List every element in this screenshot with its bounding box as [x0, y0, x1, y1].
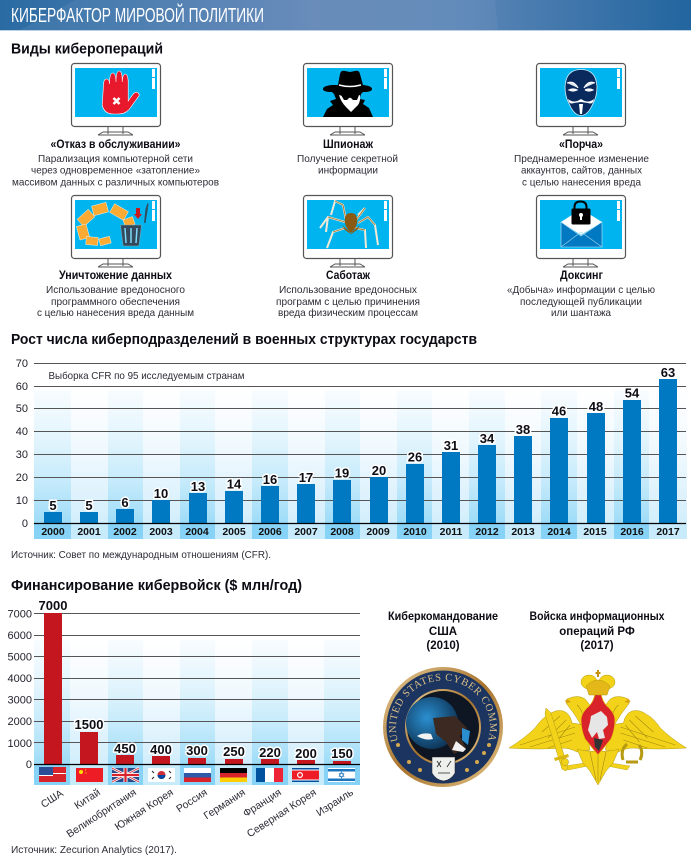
y axis labels: 60 [16, 381, 28, 393]
description: Использование вредоносного [46, 285, 185, 296]
bar chart: funding by country [8, 598, 360, 840]
emblem: cyber command seal: UNITED STATES CYBER COMMAND [389, 674, 497, 742]
value labels: 1500 [75, 717, 103, 732]
year labels: 2007 [294, 526, 318, 538]
year labels [41, 526, 680, 538]
country labels: Франция [241, 786, 284, 820]
year labels: 2002 [113, 526, 137, 538]
description: с целью нанесения вреда [522, 178, 641, 188]
description: вреда физическим процессам [278, 307, 418, 319]
value labels: 450 [114, 741, 136, 756]
caption: (2010) [426, 640, 460, 652]
year labels: 2015 [583, 526, 607, 538]
y axis labels: 2000 [8, 716, 32, 728]
value labels: 31 [444, 438, 458, 453]
panel: Russian information operations troops [509, 611, 686, 785]
value labels: 7000 [39, 598, 67, 613]
year labels: 2011 [440, 526, 463, 538]
description: Использование вредоносных [279, 285, 418, 296]
country labels: Китай [72, 786, 103, 812]
value labels: 16 [263, 472, 277, 487]
country labels: Германия [202, 786, 248, 822]
value labels [39, 598, 353, 761]
year labels: 2003 [149, 526, 173, 538]
value labels: 400 [150, 742, 172, 757]
source: Zecurion: Источник: Zecurion Analytics (2017). [11, 845, 177, 856]
year labels: 2010 [403, 526, 427, 538]
value labels: 250 [223, 744, 245, 759]
description: массивом данных с различных компьютеров [12, 178, 220, 188]
label: Саботаж [326, 270, 371, 282]
label: Доксинг [560, 270, 603, 282]
emblem: eagle with shield [509, 670, 686, 785]
value labels [49, 365, 675, 513]
y axis labels: 5000 [8, 652, 32, 664]
title: КИБЕРФАКТОР МИРОВОЙ ПОЛИТИКИ [11, 3, 264, 27]
year labels: 2009 [366, 526, 390, 538]
value labels: 220 [259, 745, 281, 760]
caption: операций РФ [559, 626, 635, 638]
value labels: 200 [295, 746, 317, 761]
value labels: 19 [335, 466, 349, 480]
country labels: США [39, 787, 66, 811]
description: «Добыча» информации с целью [507, 284, 655, 296]
year labels: 2017 [656, 526, 680, 538]
value labels: 14 [227, 476, 242, 492]
label: Шпионаж [323, 139, 374, 151]
y axis labels: 0 [26, 759, 32, 771]
heading: types of cyber operations: Виды киберопераций [11, 40, 163, 58]
caption: Войска информационных [530, 611, 665, 623]
value labels: 26 [408, 450, 422, 464]
country labels: Израиль [314, 786, 356, 819]
note: Выборка CFR по 95 исследуемым странам [48, 370, 244, 382]
y axis labels: 10 [16, 495, 28, 507]
panel: sabotage [276, 196, 420, 319]
flag: North Korea [292, 768, 319, 782]
panel: doxing [507, 196, 655, 319]
value labels: 48 [589, 399, 603, 414]
description [37, 285, 194, 319]
flag: Germany [220, 768, 247, 782]
value labels: 5 [49, 498, 57, 513]
label: «Отказ в обслуживании» [50, 139, 180, 151]
country labels: Южная Корея [113, 786, 176, 833]
year labels: 2005 [222, 526, 246, 538]
year labels: 2012 [475, 526, 499, 538]
y axis labels: 6000 [8, 630, 32, 642]
panel: denial of service [12, 64, 220, 188]
bars [44, 379, 677, 524]
y axis labels: 30 [16, 449, 28, 461]
description: Парализация компьютерной сети [38, 154, 193, 165]
value labels: 17 [299, 470, 313, 485]
panel: data destruction [37, 196, 194, 319]
label: Уничтожение данных [59, 270, 173, 282]
value labels: 150 [331, 746, 353, 761]
description [297, 154, 398, 176]
country labels: Северная Корея [245, 786, 319, 840]
description: или шантажа [551, 308, 611, 319]
description [12, 154, 220, 188]
year labels: 2014 [547, 526, 571, 538]
icon: red hand [102, 71, 139, 114]
y axis labels: 7000 [8, 608, 32, 620]
emblem: cyber command seal [383, 667, 503, 787]
icon: spy [323, 71, 373, 117]
icon: folders and trash [76, 202, 148, 246]
y axis labels: 3000 [8, 694, 32, 706]
year labels: 2016 [620, 526, 644, 538]
y axis labels: 40 [16, 426, 28, 438]
caption: Киберкомандование [388, 611, 498, 623]
year labels: 2001 [77, 526, 101, 538]
value labels: 34 [480, 431, 495, 446]
icon: spider [320, 201, 378, 248]
panel: espionage [297, 64, 398, 176]
y axis labels [8, 608, 32, 771]
value labels: 300 [186, 743, 208, 758]
value labels: 46 [552, 404, 566, 418]
year labels: 2008 [330, 526, 354, 538]
description: информации [318, 164, 378, 176]
description: программного обеспечения [51, 296, 180, 308]
description [276, 285, 420, 319]
y axis labels [16, 358, 28, 530]
value labels: 5 [85, 498, 93, 513]
flag: UK [112, 768, 139, 782]
country labels: Великобритания [64, 786, 139, 840]
bars [44, 613, 351, 764]
country labels: Россия [174, 786, 210, 815]
description: аккаунтов, сайтов, данных [521, 166, 643, 176]
country labels [39, 786, 356, 840]
y axis labels: 0 [22, 518, 28, 530]
value labels: 63 [661, 365, 675, 380]
panel: US Cyber Command [383, 611, 503, 787]
caption: (2017) [580, 640, 614, 652]
caption [530, 611, 665, 652]
year labels: 2013 [511, 526, 535, 538]
description: Получение секретной [297, 154, 398, 165]
y axis labels: 70 [16, 358, 28, 370]
caption [388, 611, 498, 652]
value labels: 10 [154, 486, 168, 501]
icon: mask [565, 70, 597, 116]
flag: China [76, 768, 103, 782]
description [514, 154, 649, 188]
y axis labels: 50 [16, 403, 28, 415]
value labels: 38 [516, 422, 530, 437]
description: последующей публикации [520, 296, 642, 308]
description: с целью нанесения вреда данным [37, 308, 194, 319]
icon: envelope with lock [561, 202, 602, 247]
y axis labels: 4000 [8, 673, 32, 685]
description: программ с целью причинения [276, 297, 420, 308]
heading: cyber units growth: Рост числа киберподразделений в военных структурах государств [11, 331, 477, 348]
label: «Порча» [559, 139, 603, 151]
flag: Israel [328, 768, 355, 782]
flag: France [256, 768, 283, 782]
flag: USA [39, 767, 66, 782]
header banner [0, 0, 691, 31]
description: Преднамеренное изменение [514, 154, 649, 165]
bar chart: cyber units by year [16, 358, 687, 539]
value labels: 54 [625, 386, 640, 400]
year labels: 2006 [258, 526, 282, 538]
description: через одновременное «затопление» [31, 166, 200, 176]
source: CFR: Источник: Совет по международным отношениям (CFR). [11, 550, 271, 561]
y axis labels: 20 [16, 472, 28, 484]
description [507, 284, 655, 319]
value labels: 6 [121, 495, 129, 510]
flag: South Korea [148, 768, 175, 782]
value labels: 13 [191, 479, 205, 494]
caption: США [429, 626, 457, 638]
year labels: 2004 [185, 526, 209, 538]
panel: defacement [514, 64, 649, 188]
value labels: 20 [372, 463, 386, 478]
year labels: 2000 [41, 526, 65, 538]
heading: cyber forces funding: Финансирование кибервойск ($ млн/год) [11, 577, 302, 594]
flag: Russia [184, 768, 211, 782]
y axis labels: 1000 [8, 738, 32, 750]
